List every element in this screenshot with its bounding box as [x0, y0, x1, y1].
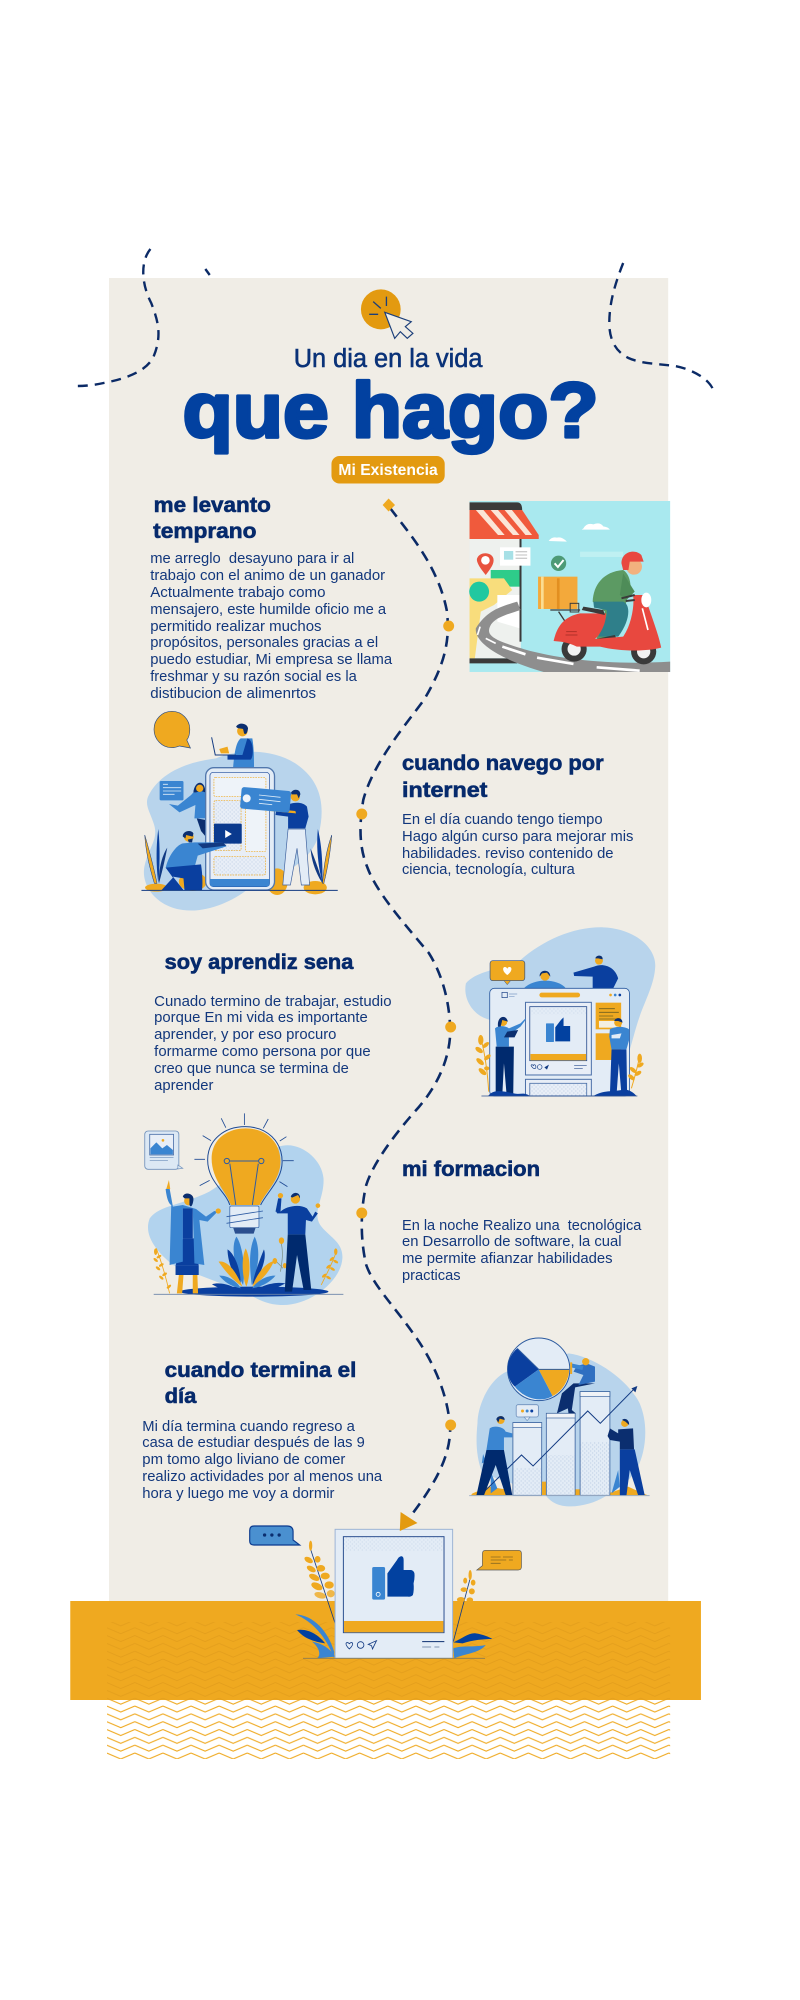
heading: cuando navego por internet: cuando navego por — [402, 751, 604, 775]
text block: cuando navego por internet — [402, 812, 633, 878]
illustration: delivery scooter — [469, 501, 670, 672]
illustration: like card with plants — [250, 1526, 521, 1658]
illustration: lightbulb — [145, 1113, 343, 1305]
text block: cuando navego por internet: habilidades. reviso contenido de — [402, 846, 614, 862]
heading: soy aprendiz sena: soy aprendiz sena — [165, 950, 354, 974]
footer band: orange — [70, 1601, 701, 1700]
text block: soy aprendiz sena: aprender — [154, 1078, 214, 1094]
text block: me levanto temprano: permitido realizar muchos — [150, 619, 322, 635]
text block: cuando navego por internet: En el día cuando tengo tiempo — [402, 812, 603, 828]
text block: cuando termina el dia — [142, 1419, 383, 1502]
text block: soy aprendiz sena: porque En mi vida es importante — [154, 1010, 368, 1026]
text block: cuando termina el dia: pm tomo algo liviano de comer — [142, 1452, 346, 1468]
heading: cuando termina el dia — [165, 1358, 356, 1408]
decorative dashed curve: top left — [77, 249, 210, 386]
heading: me levanto temprano — [153, 493, 271, 543]
text block: soy aprendiz sena: Cunado termino de trabajar, estudio — [154, 994, 392, 1010]
heading: me levanto temprano: me levanto — [154, 493, 271, 517]
decorative dashed curve: top right — [609, 263, 713, 389]
illustration: phone team — [141, 711, 338, 911]
text block: cuando navego por internet: ciencia, tecnología, cultura — [402, 862, 576, 878]
heading: cuando navego por internet — [402, 751, 604, 802]
illustration: social media board — [465, 927, 655, 1096]
text block: me levanto temprano: me arreglo desayuno para ir al — [150, 551, 354, 567]
text block: soy aprendiz sena — [154, 994, 392, 1094]
timeline dashed path — [356, 498, 456, 1513]
heading: cuando termina el dia: cuando termina el — [165, 1358, 356, 1382]
text block: cuando termina el dia: Mi día termina cuando regreso a — [142, 1419, 356, 1435]
title: small: Un dia en la vida — [294, 345, 483, 373]
text block: me levanto temprano: distibucion de alimenrtos — [150, 686, 316, 702]
text block: mi formacion — [402, 1218, 642, 1284]
panel: background — [109, 278, 668, 1601]
badge: Mi Existencia — [331, 456, 445, 484]
text block: soy aprendiz sena: creo que nunca se termina de — [154, 1061, 349, 1077]
decorative zigzag pattern — [107, 1622, 670, 1759]
heading: mi formacion: mi formacion — [402, 1157, 540, 1181]
text block: me levanto temprano: puedo estudiar, Mi empresa se llama — [150, 652, 393, 668]
text block: mi formacion: practicas — [402, 1268, 461, 1284]
title: large: que hago? — [182, 368, 599, 454]
text block: me levanto temprano: Actualmente trabajo como — [150, 585, 326, 601]
text block: me levanto temprano: freshmar y su razón social es la — [150, 669, 358, 685]
icon: cursor click — [361, 289, 413, 338]
heading: cuando termina el dia: día — [165, 1384, 198, 1408]
text block: mi formacion: En la noche Realizo una tecnológica — [402, 1218, 642, 1234]
illustration: growth chart — [469, 1338, 650, 1506]
heading: cuando navego por internet: internet — [402, 778, 487, 802]
heading: me levanto temprano: temprano — [153, 519, 256, 543]
text block: cuando navego por internet: Hago algún curso para mejorar mis — [402, 829, 633, 845]
text block: me levanto temprano — [150, 551, 393, 702]
text block: soy aprendiz sena: aprender, y por eso procuro — [154, 1027, 336, 1043]
arrow: timeline end — [400, 1512, 417, 1531]
text block: mi formacion: me permite afianzar habilidades — [402, 1251, 613, 1267]
text block: cuando termina el dia: casa de estudiar después de las 9 — [142, 1435, 365, 1451]
text block: soy aprendiz sena: formarme como persona por que — [154, 1044, 371, 1060]
text block: cuando termina el dia: realizo actividades por al menos una — [142, 1469, 383, 1485]
text block: cuando termina el dia: hora y luego me voy a dormir — [142, 1486, 335, 1502]
text block: me levanto temprano: mensajero, este humilde oficio me a — [150, 602, 387, 618]
text block: me levanto temprano: trabajo con el animo de un ganador — [150, 568, 385, 584]
text block: mi formacion: en Desarrollo de software, la cual — [402, 1234, 621, 1250]
badge: Mi Existencia: Mi Existencia — [338, 462, 438, 479]
text block: me levanto temprano: propósitos, personales gracias a el — [150, 635, 378, 651]
